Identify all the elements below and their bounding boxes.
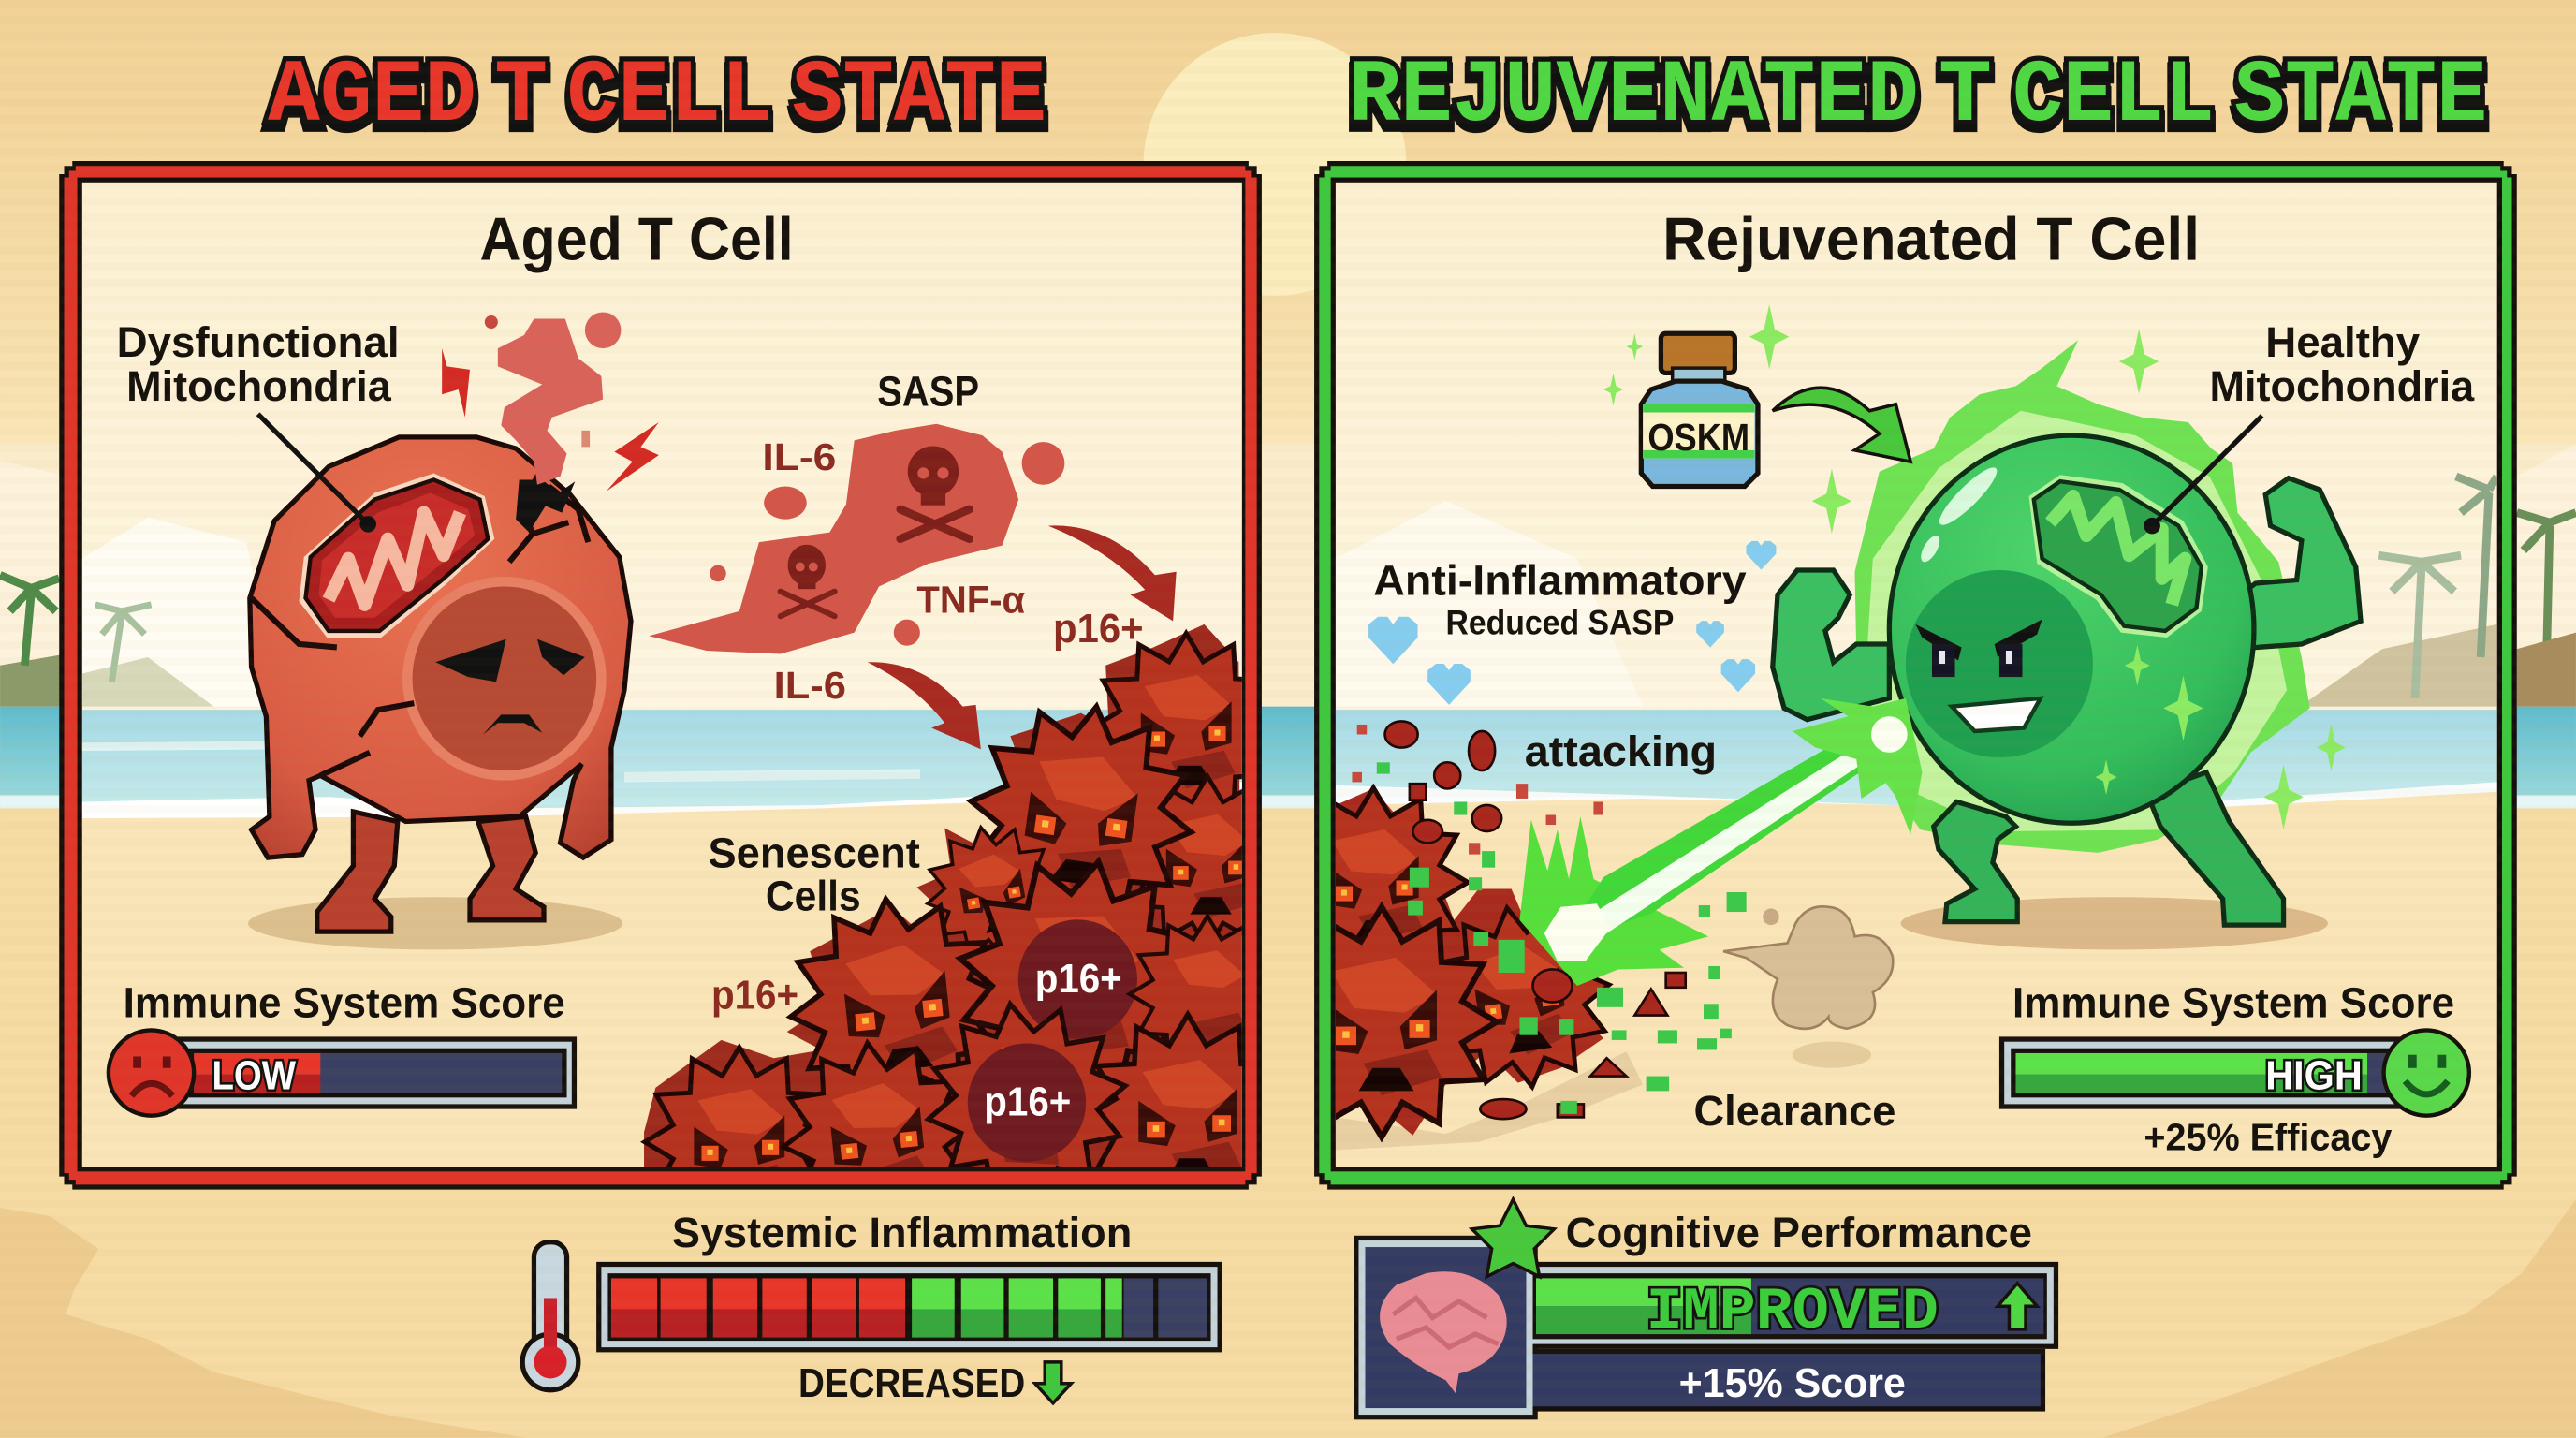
label: p16+ upper: p16+	[1053, 606, 1144, 652]
title: rejuvenated T cell state: T	[1939, 53, 1992, 154]
title: rejuvenated T cell state: T	[1939, 47, 1992, 147]
score bar: LOW: LOW	[212, 1053, 296, 1099]
label: Dysfunctional Mitochondria: Dysfunctional	[117, 318, 400, 366]
label: Senescent Cells: Cells	[766, 872, 861, 919]
bar: improved	[1532, 1262, 2058, 1349]
score bar: LOW	[178, 1036, 577, 1109]
aged cell cracks	[252, 457, 588, 775]
arrow: improved	[1998, 1284, 2037, 1329]
title: rejuvenated T cell state: STATE	[2234, 47, 2487, 147]
title: aged T cell state: CELL	[567, 53, 772, 154]
green cell mitochondria	[2029, 475, 2208, 638]
label: Immune System Score rejuvenated: Immune System Score	[2012, 978, 2454, 1026]
character: aged T cell	[250, 437, 631, 932]
aged cell legs	[317, 812, 544, 932]
title: rejuvenated T cell state: CELL	[2012, 47, 2215, 147]
inflammation bar	[596, 1262, 1222, 1352]
icon: happy face	[2384, 1030, 2469, 1116]
cell with p16+ upper	[955, 856, 1193, 1071]
label: p16+ on cell upper: p16+	[1035, 956, 1122, 1002]
title: aged T cell state: STATE	[792, 53, 1046, 154]
panel heading: Aged T Cell: Aged T Cell	[480, 204, 794, 272]
icon: skull small	[781, 546, 835, 616]
icon: SASP toxic cloud	[649, 424, 1064, 654]
score panel: +15% Score: +15% Score	[1679, 1360, 1906, 1406]
title: aged T cell state	[268, 47, 1046, 154]
arrow: SASP to senescent upper	[1048, 525, 1177, 621]
icon: sad face	[109, 1030, 194, 1116]
label: Senescent Cells	[708, 829, 920, 919]
label: +25% Efficacy: +25% Efficacy	[2144, 1116, 2393, 1159]
panel heading: Rejuvenated T Cell: Rejuvenated T Cell	[1662, 204, 2200, 272]
aged cell body and arms	[250, 437, 631, 858]
aged cell mitochondria	[299, 473, 494, 638]
arrow: decreased	[1035, 1362, 1071, 1403]
title: aged T cell state: STATE	[792, 47, 1046, 147]
metric: cognitive performance	[1354, 1199, 2058, 1419]
icon: smoke plume	[485, 312, 621, 485]
score bar: HIGH: HIGH	[2265, 1053, 2363, 1099]
label: Dysfunctional Mitochondria: Mitochondria	[126, 362, 391, 410]
label: IL-6 upper: IL-6	[762, 435, 836, 478]
green cell body	[1889, 435, 2254, 823]
score panel: +15% Score	[1532, 1349, 2045, 1412]
green cell legs	[1934, 772, 2284, 925]
illustration: laser beam	[1519, 698, 1922, 986]
label: Anti-Inflammatory	[1373, 556, 1747, 641]
arrow: OSKM to cell	[1773, 388, 1910, 462]
score bar: HIGH	[1999, 1036, 2417, 1109]
title: aged T cell state: AGED	[268, 53, 476, 154]
label: p16+ left: p16+	[711, 973, 798, 1019]
title: rejuvenated T cell state: CELL	[2012, 53, 2215, 154]
icon: lightning bolts	[442, 348, 659, 492]
illustration: senescent cells under attack	[1335, 783, 1614, 1142]
illustration: glowing aura	[1852, 340, 2310, 853]
title: rejuvenated T cell state: REJUVENATED	[1349, 53, 1919, 154]
label: SASP: SASP	[877, 367, 979, 415]
debris: cell fragments	[1352, 721, 1747, 1119]
bar: improved: IMPROVED	[1647, 1278, 1939, 1345]
title: aged T cell state: T	[494, 53, 548, 154]
label: Systemic Inflammation: Systemic Inflammation	[672, 1209, 1132, 1256]
icon: OSKM vial: OSKM	[1647, 416, 1749, 459]
panel frame: green border	[1314, 161, 2517, 1190]
label: attacking: attacking	[1525, 727, 1717, 775]
label: Healthy Mitochondria: Mitochondria	[2210, 362, 2475, 410]
label: IL-6 lower: IL-6	[774, 664, 846, 707]
icon: dust cloud	[1723, 906, 1893, 1029]
brain box	[1354, 1236, 1538, 1419]
sparkles around vial and cell	[1603, 304, 2346, 829]
panel scenery: beach	[82, 518, 1242, 1167]
sparkles on cell	[2095, 645, 2203, 795]
label: Clearance: Clearance	[1693, 1087, 1895, 1135]
title: aged T cell state: AGED	[268, 47, 476, 147]
label: Healthy Mitochondria: Healthy	[2265, 318, 2421, 366]
icon: brain	[1380, 1271, 1507, 1393]
label: Anti-Inflammatory: Reduced SASP	[1445, 603, 1674, 641]
arrow: SASP to senescent lower	[868, 662, 981, 749]
icons: blue hearts	[1368, 541, 1776, 705]
label: Senescent Cells: Senescent	[708, 829, 920, 877]
cell with p16+ lower	[924, 1000, 1130, 1167]
icon: green star	[1472, 1199, 1554, 1277]
title: aged T cell state: CELL	[567, 47, 772, 147]
label: Dysfunctional Mitochondria	[117, 318, 400, 533]
green cell highlights	[1917, 462, 2003, 565]
panel frame: red border	[59, 161, 1262, 1190]
panel: rejuvenated T cell	[1266, 161, 2517, 1190]
panel: aged T cell	[59, 161, 1294, 1240]
title: rejuvenated T cell state: STATE	[2234, 53, 2487, 154]
label: DECREASED: DECREASED	[798, 1360, 1025, 1406]
title: rejuvenated T cell state	[1349, 47, 2487, 154]
label: TNF-alpha: TNF-α	[916, 579, 1025, 622]
character: rejuvenated T cell	[1773, 435, 2361, 925]
metric: systemic inflammation	[522, 1209, 1222, 1406]
title: rejuvenated T cell state: REJUVENATED	[1349, 47, 1919, 147]
aged cell face	[402, 577, 607, 781]
icon: skull large	[900, 447, 970, 539]
label: p16+ on cell lower: p16+	[984, 1079, 1071, 1125]
label: Cognitive Performance: Cognitive Performance	[1566, 1209, 2032, 1256]
title: aged T cell state: T	[494, 47, 548, 147]
illustration: senescent cell cluster	[640, 624, 1242, 1167]
green cell arms	[1773, 478, 2361, 720]
icon: OSKM vial	[1641, 333, 1758, 486]
icon: thermometer	[522, 1242, 578, 1390]
green cell face	[1906, 570, 2093, 757]
label: Immune System Score aged: Immune System Score	[124, 978, 565, 1026]
label: Anti-Inflammatory: Anti-Inflammatory	[1373, 556, 1747, 604]
panel scenery: beach	[1336, 477, 2497, 1167]
label: Healthy Mitochondria	[2144, 318, 2475, 534]
